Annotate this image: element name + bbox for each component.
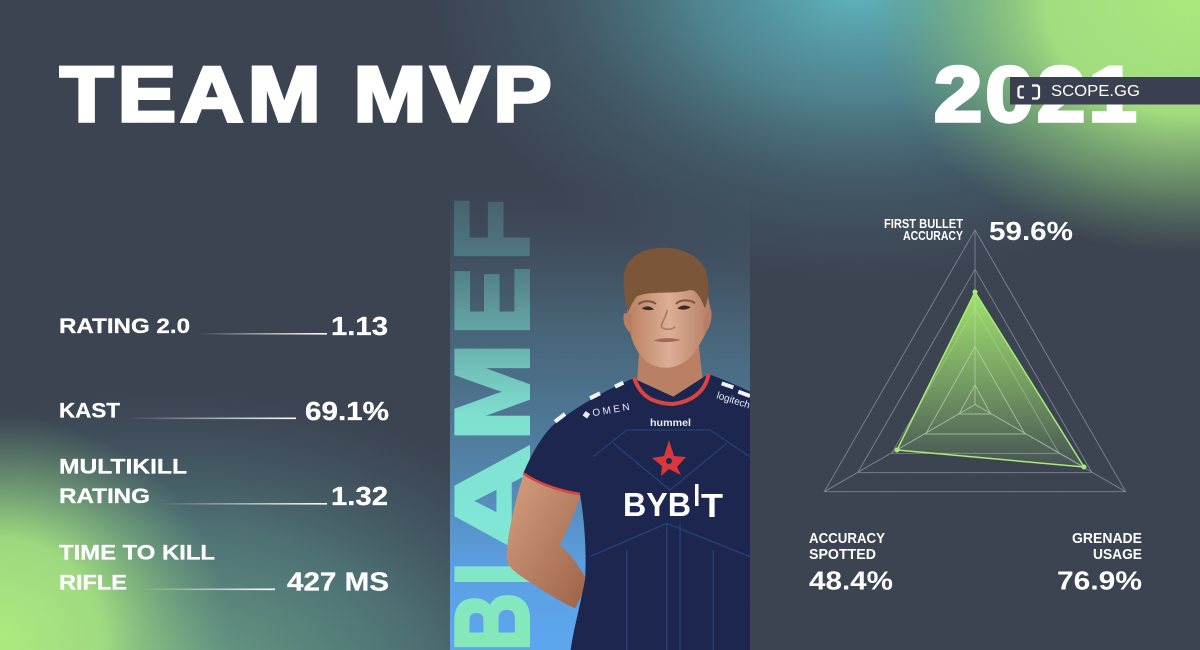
sponsor: bybit: BYB: [623, 486, 691, 523]
radar label: grenade usage: 76.9%: [1057, 566, 1142, 596]
ears: [623, 310, 712, 333]
stat: time to kill rifle: [59, 542, 389, 596]
sponsor: star logo: [652, 440, 686, 476]
brand name: SCOPE.GG: [1051, 83, 1140, 100]
radar data points: [894, 290, 1086, 470]
radar label: accuracy spotted: SPOTTED: [809, 547, 876, 563]
sponsor: logitech: logitech: [715, 390, 751, 412]
radar label: first bullet accuracy: ACCURACY: [903, 229, 964, 243]
vertical player name: F: [435, 199, 551, 261]
panel: player: [435, 190, 751, 650]
radar label: grenade usage: GRENADE: [1072, 531, 1142, 547]
vertical player name: B: [435, 593, 551, 650]
stat: kast: 69.1%: [305, 396, 389, 426]
player figure: [507, 248, 751, 650]
stat: multikill rating: MULTIKILL: [59, 456, 187, 478]
sponsor: bybit: [625, 484, 723, 517]
radar label: first bullet accuracy: 59.6%: [989, 216, 1073, 246]
title: TEAM MVP: [60, 50, 556, 138]
stat: rating 2.0: RATING 2.0: [59, 315, 190, 338]
stat: multikill rating: 1.32: [331, 481, 388, 511]
radar label: grenade usage: USAGE: [1093, 547, 1142, 563]
stat: kast: KAST: [59, 400, 120, 422]
radar label: first bullet accuracy: [884, 216, 1073, 246]
vertical player name: L: [435, 534, 551, 586]
radar label: accuracy spotted: [809, 531, 893, 596]
vertical player name: [454, 200, 530, 648]
radar label: first bullet accuracy: FIRST BULLET: [884, 217, 963, 231]
hair: [624, 248, 708, 312]
nose and mouth: [661, 310, 675, 329]
sleeve trim: [523, 473, 580, 494]
radar chart: [824, 230, 1126, 492]
stat: multikill rating: RATING: [59, 485, 150, 508]
radar label: grenade usage: [1057, 531, 1142, 596]
stat: time to kill rifle: RIFLE: [59, 572, 127, 594]
collar: [634, 374, 709, 404]
eyes and brows: [638, 300, 695, 304]
radar data area: [897, 292, 1084, 467]
sponsor: omen: ◆OMEN: [582, 401, 633, 421]
brand banner: [1010, 77, 1200, 104]
stat: time to kill rifle: 427 MS: [287, 566, 389, 596]
neck: [637, 346, 702, 397]
sponsor: bybit: T: [701, 487, 723, 524]
radar label: accuracy spotted: ACCURACY: [809, 531, 885, 547]
stat: kast: [59, 396, 389, 426]
radar label: accuracy spotted: 48.4%: [809, 566, 893, 596]
radar inner grid over data: [897, 292, 1084, 467]
shoulder stripes: [555, 383, 750, 422]
shirt: [523, 374, 750, 650]
face: [627, 273, 711, 368]
shirt pattern: [590, 430, 750, 650]
year: 2021: [934, 50, 1140, 138]
stat: rating 2.0: 1.13: [331, 311, 388, 341]
radar grid: [824, 230, 1126, 492]
arm: [507, 473, 588, 608]
stat: rating 2.0: [59, 311, 388, 341]
vertical player name: A: [435, 445, 551, 557]
vertical player name: M: [435, 343, 551, 441]
icon: scope brackets: [1018, 86, 1039, 98]
panel: stats: [59, 311, 389, 596]
stat: time to kill rifle: TIME TO KILL: [59, 542, 215, 564]
vertical player name: E: [435, 267, 551, 335]
sponsor: hummel: hummel: [650, 418, 691, 429]
stat: multikill rating: [59, 456, 388, 511]
